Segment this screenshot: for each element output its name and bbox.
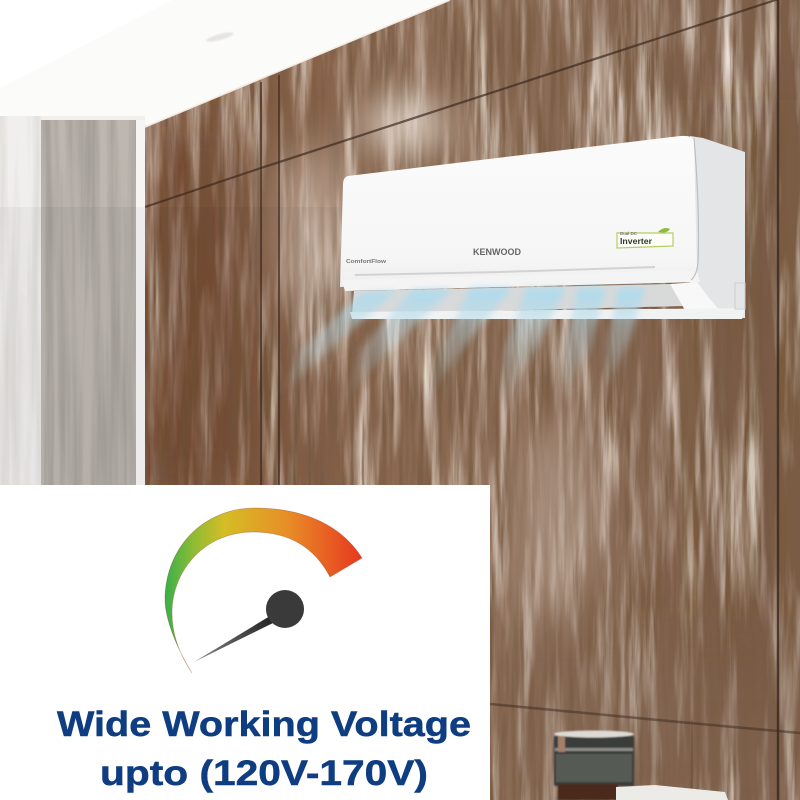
air conditioner unit (340, 136, 745, 319)
jar on shelf (554, 730, 634, 800)
AC lower lip (342, 270, 700, 291)
lower scene tint (0, 207, 340, 485)
AC side panel (690, 136, 745, 318)
brand name: KENWOOD (473, 247, 521, 258)
AC side button (735, 283, 745, 309)
gauge arc (165, 508, 362, 673)
icon: voltage gauge (165, 508, 362, 673)
AC vent opening (352, 284, 686, 314)
AC accent strip (355, 267, 655, 275)
cold air flow (280, 288, 645, 405)
heading: voltage range: upto (120V-170V) (100, 754, 428, 793)
inverter badge: Inverter (620, 237, 652, 246)
curtain (0, 116, 145, 486)
panel: voltage feature (0, 485, 490, 800)
gauge hub (266, 590, 304, 628)
white box on shelf (616, 785, 728, 800)
inverter badge (617, 228, 673, 248)
AC bottom rail (350, 308, 745, 319)
AC front body (340, 136, 697, 287)
ceiling upper plane (0, 0, 172, 88)
ceiling edge highlight (145, 0, 450, 127)
inverter badge: Dual DC (620, 231, 638, 236)
ceiling spotlight (206, 30, 234, 44)
gauge needle (194, 616, 273, 662)
light glow on wall (150, 100, 800, 800)
AC side seam (691, 138, 698, 280)
ceiling (0, 0, 800, 130)
heading: wide working voltage: Wide Working Voltage (57, 705, 471, 744)
AC corner sweep (670, 282, 722, 313)
comfort label: ComfortFlow (346, 259, 387, 265)
